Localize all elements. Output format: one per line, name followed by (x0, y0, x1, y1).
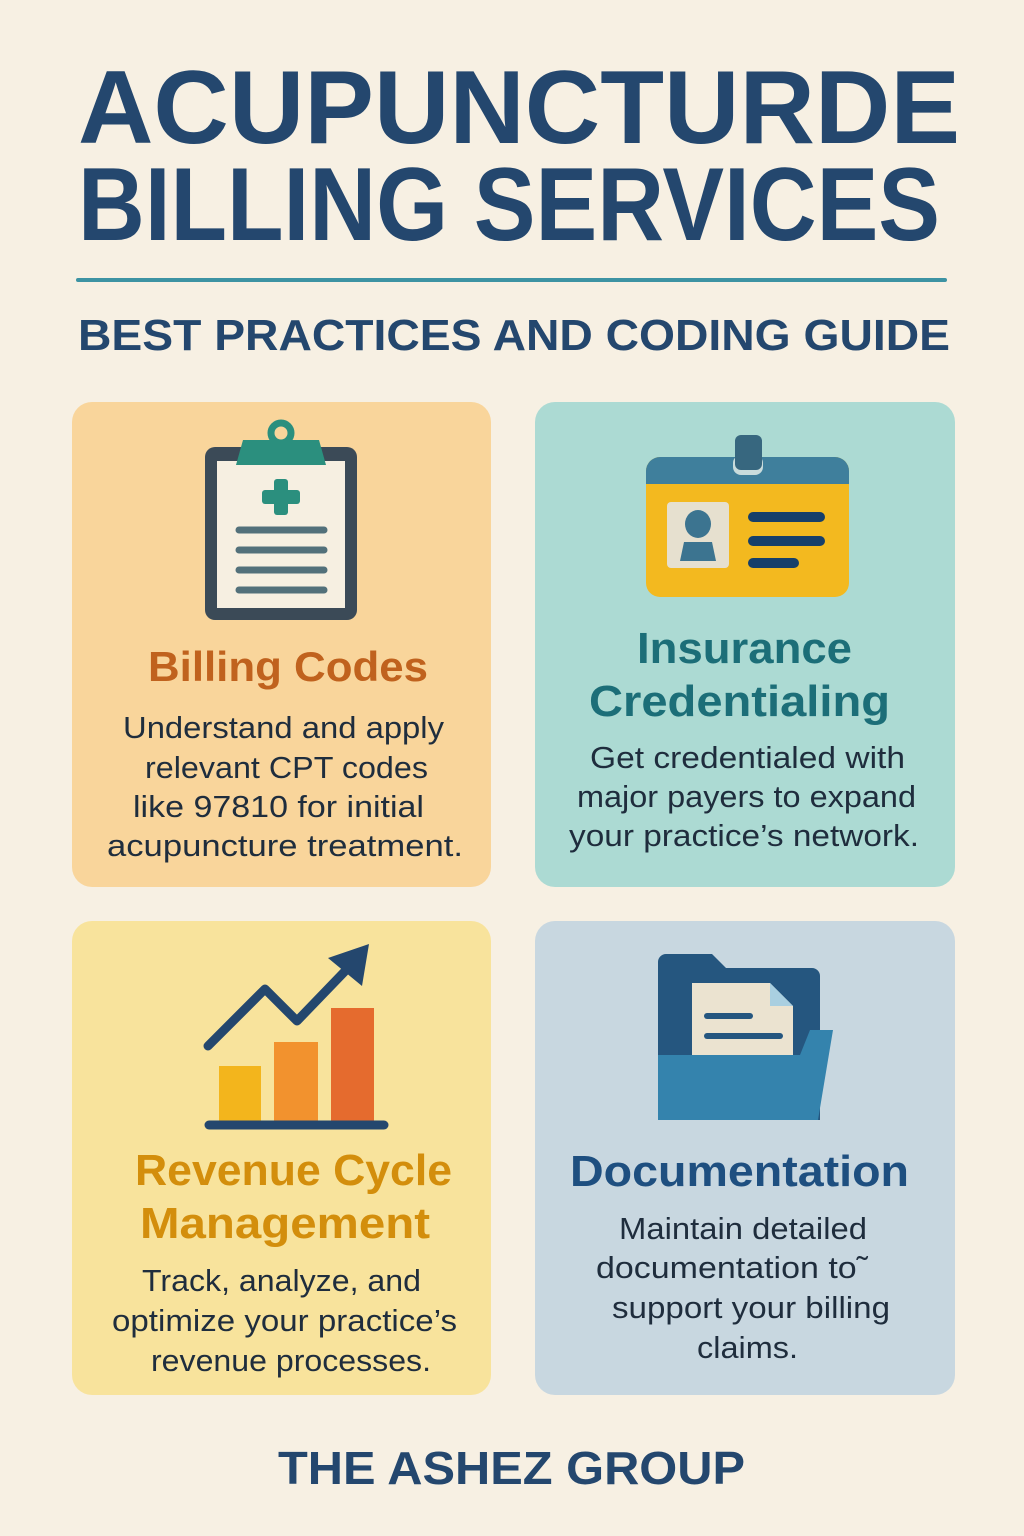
text: documentation body: support your billing (612, 1290, 890, 1325)
panel: billing codes (72, 402, 491, 887)
title: BILLING SERVICES (78, 147, 940, 263)
text: revenue body (112, 1263, 457, 1378)
text: billing codes body: like 97810 for initial (133, 789, 424, 824)
subtitle: BEST PRACTICES AND CODING GUIDE (78, 311, 950, 360)
title (78, 50, 960, 263)
title: ACUPUNCTURDE (78, 50, 960, 166)
panel: revenue cycle management (72, 921, 491, 1395)
panel: documentation (535, 921, 955, 1395)
heading: insurance credentialing: Insurance (637, 624, 852, 673)
text: revenue body: Track, analyze, and (142, 1263, 421, 1298)
icon: clipboard (205, 423, 357, 620)
text: billing codes body: acupuncture treatment. (107, 828, 463, 863)
text: documentation body: documentation to˜ (596, 1250, 869, 1285)
heading: insurance credentialing (589, 624, 890, 726)
icon: bar chart with arrow (208, 944, 384, 1125)
heading: billing codes: Billing Codes (148, 643, 428, 690)
panel: insurance credentialing (535, 402, 955, 887)
heading: revenue cycle: Revenue Cycle (135, 1146, 452, 1195)
text: documentation body: claims. (697, 1330, 798, 1365)
heading: revenue cycle: Management (140, 1199, 430, 1248)
text: insurance body: Get credentialed with (590, 740, 905, 775)
text: revenue body: optimize your practice’s (112, 1303, 457, 1338)
text: documentation body: Maintain detailed (619, 1211, 867, 1246)
icon: folder (658, 954, 833, 1120)
heading: revenue cycle (135, 1146, 452, 1248)
text: revenue body: revenue processes. (151, 1343, 431, 1378)
heading: documentation: Documentation (570, 1147, 909, 1196)
text: insurance body: your practice’s network. (569, 818, 919, 853)
text: insurance body: major payers to expand (577, 779, 916, 814)
text: documentation body (596, 1211, 890, 1365)
footer: THE ASHEZ GROUP (278, 1442, 745, 1494)
heading: insurance credentialing: Credentialing (589, 677, 890, 726)
text: insurance body (569, 740, 919, 853)
text: billing codes body: relevant CPT codes (145, 750, 428, 785)
icon: id badge (646, 435, 849, 597)
text: billing codes body: Understand and apply (123, 710, 445, 745)
text: billing codes body (107, 710, 463, 863)
